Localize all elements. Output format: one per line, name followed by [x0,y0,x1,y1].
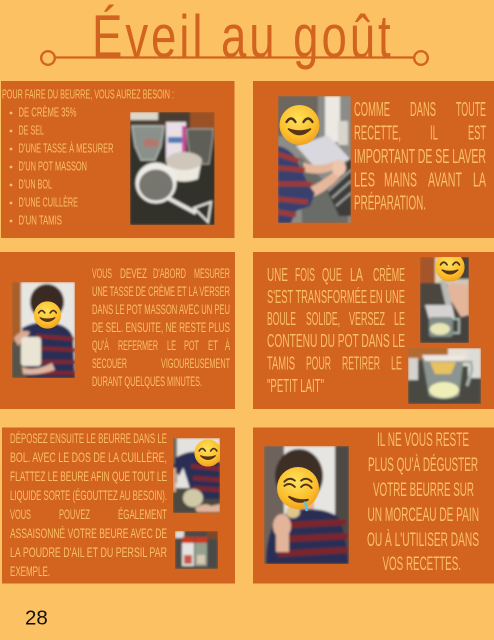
emoji [277,467,319,511]
shake the jar text: VIGOUREUSEMENT [161,356,230,371]
emoji [194,439,222,467]
photo: pouring through sieve [420,257,469,343]
wash hands text: MAINS [384,170,417,192]
drain and season text: FLATTEZ LE BEURE AFIN QUE TOUT LE [10,468,167,484]
strain the butter text: UNE [267,265,288,285]
photo: child shaking jar [12,282,75,378]
strain the butter text [267,265,405,396]
drain and season text: ÉGALEMENT [118,506,167,522]
strain the butter text: FOIS [295,265,315,285]
panel: taste [253,428,494,584]
strain the butter text: LE [391,354,402,374]
ingredients list [10,104,114,228]
wash hands text: AVANT [428,170,462,192]
shake the jar text: QU'À [92,338,109,353]
ingredients list: D'UNE TASSE À MESURER [18,140,114,156]
panel: wash hands [253,81,494,238]
drain and season text: EXEMPLE. [10,563,50,579]
strain the butter text: BOULE [267,309,296,329]
strain the butter text: LA [350,265,363,285]
photo: child washing hands [278,96,351,223]
strain the butter text: "PETIT LAIT" [267,376,324,396]
wash hands text: LES [354,170,375,192]
panel: shake the jar [0,252,235,409]
strain the butter text: VERSEZ [349,309,385,329]
measuring cup [132,126,164,160]
ingredients list: D'UNE CUILLÈRE [18,194,78,210]
panel: drain and season [2,428,235,584]
panel: strain the butter [253,252,494,409]
drain and season text: VOUS [10,506,31,522]
ingredients list: DE SEL [18,122,44,138]
photo: child tasting butter on bread [264,446,349,564]
emoji [34,301,61,329]
photo: flattening butter [173,438,220,513]
panel: ingredients [1,81,234,238]
shake the jar text: DEVEZ [120,266,147,281]
drain and season text [10,430,167,579]
ingredients heading: POUR FAIRE DU BEURRE, VOUS AUREZ BESOIN : [2,86,174,102]
drain and season text: ASSAISONNÉ VOTRE BEURE AVEC DE [10,525,167,541]
shake the jar text: DANS LE POT MASSON AVEC UN PEU [92,302,230,317]
strain the butter text: TAMIS [267,354,295,374]
shake the jar text: ET [208,338,218,353]
wash hands text: IL [430,122,438,144]
shake the jar text: DURANT QUELQUES MINUTES. [92,374,202,389]
wash hands text: COMME [354,99,390,121]
photo: petit lait in measuring cup [408,348,481,404]
shake the jar text: SECOUER [92,356,127,371]
shake the jar text: D'ABORD [153,266,186,281]
shake the jar text: MESURER [194,266,230,281]
wash hands text: DANS [410,99,436,121]
drain and season text: LIQUIDE SORTE (ÉGOUTTEZ AU BESOIN). [10,487,167,503]
shake the jar text: UNE TASSE DE CRÈME ET LA VERSER [92,284,230,299]
drain and season text: DÉPOSEZ ENSUITE LE BEURRE DANS LE [10,430,167,446]
ingredients list: DE CRÈME 35% [18,104,77,120]
drain and season text: LA POUDRE D'AIL ET DU PERSIL PAR [10,544,167,560]
strain the butter text: POUR [306,354,331,374]
bowl [166,159,202,182]
drain and season text: BOL. AVEC LE DOS DE LA CUILLÈRE, [10,449,167,465]
shake the jar text: POT [184,338,199,353]
ingredients list: D'UN BOL [18,176,52,192]
shake the jar text: VOUS [92,266,112,281]
strainer [136,162,176,204]
photo: garlic powder and parsley [175,531,218,569]
wash hands text: RECETTE, [354,122,401,144]
strain the butter text: QUE [322,265,342,285]
shake the jar text: LE [167,338,176,353]
salt box [166,122,186,160]
shake the jar text [92,266,230,389]
page number: 28 [25,606,48,630]
shake the jar text: REFERMER [118,338,158,353]
ingredients list: D'UN POT MASSON [18,158,87,174]
emoji [280,105,320,145]
emoji [435,252,465,282]
panel: strain the butter: LE [394,309,405,329]
drain and season text: POUVEZ [59,506,90,522]
strain the butter text: RETIRER [342,354,380,374]
ingredients list: D'UN TAMIS [18,212,62,228]
panel: strain the butter: CRÈME [373,265,405,285]
shake the jar text: À [225,338,230,353]
shake the jar text: DE SEL. ENSUITE, NE RESTE PLUS [92,320,230,335]
strain the butter text: SOLIDE, [306,309,340,329]
photo: ingredients and utensils [130,112,214,225]
taste text [367,430,479,575]
jar [187,129,213,164]
title: Éveil au goût [92,4,391,71]
wash hands text [354,99,486,214]
